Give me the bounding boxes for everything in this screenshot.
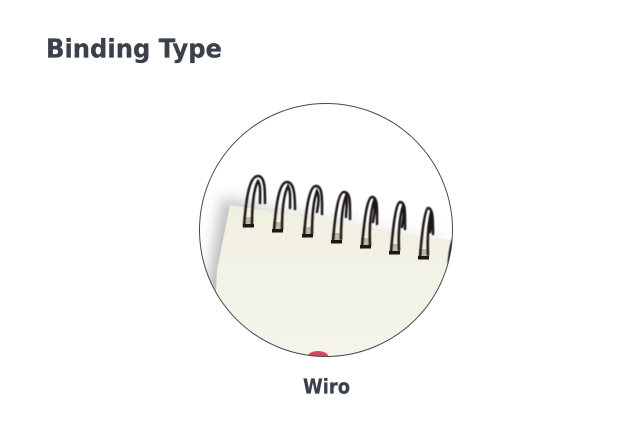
circular notebook photo — [200, 104, 460, 370]
title: Binding Type — [46, 34, 222, 64]
coil 2 — [274, 182, 295, 231]
spiral wire binding — [244, 176, 453, 262]
wire holes — [244, 217, 428, 258]
notebook page — [216, 205, 452, 356]
coil 1 — [244, 176, 265, 226]
coil 6 — [391, 202, 405, 252]
coil 5 — [362, 197, 377, 247]
caption: Wiro — [303, 374, 350, 398]
red mark at page edge — [308, 351, 328, 356]
coil 3 — [304, 186, 322, 236]
partly hidden coil at right edge — [449, 240, 453, 262]
coil 4 — [333, 192, 350, 241]
circle outline — [200, 104, 452, 356]
coil 7 — [420, 208, 433, 257]
notebook shadow — [204, 192, 424, 292]
hole bottom edges — [243, 224, 429, 260]
